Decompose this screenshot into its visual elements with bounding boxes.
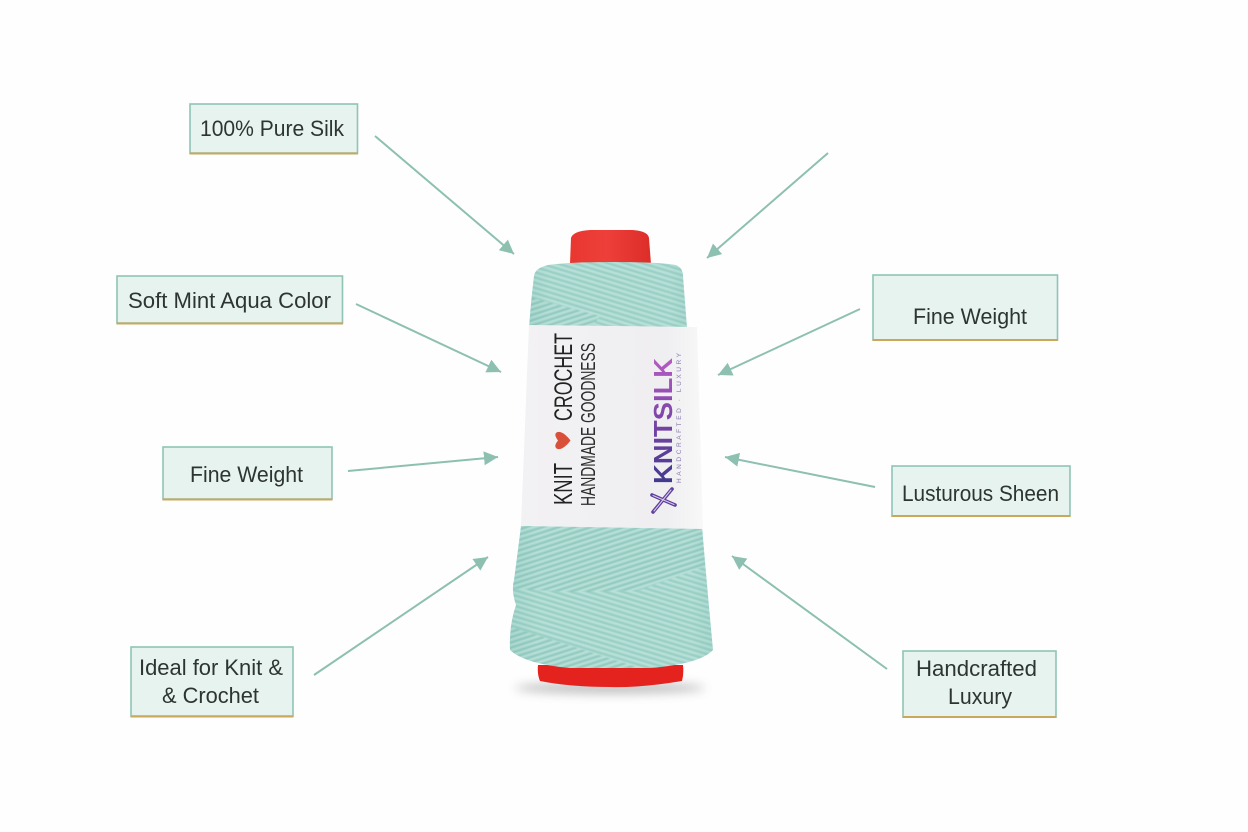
cone shadow xyxy=(515,682,705,694)
callout: 100% Pure Silk xyxy=(190,104,358,154)
callout: Lusturous Sheen xyxy=(892,466,1070,516)
callout: Fine Weight right: Fine Weight xyxy=(913,304,1027,329)
heart icon xyxy=(555,432,570,449)
callout: Fine Weight left xyxy=(162,447,332,500)
upper yarn winding xyxy=(529,262,687,327)
callout: Soft Mint Aqua Color: Soft Mint Aqua Color xyxy=(128,288,331,313)
yarn cone product xyxy=(505,230,717,694)
arrow: lower right to cone xyxy=(732,556,887,669)
arrow: middle right to cone xyxy=(725,457,875,487)
arrow: top left to cone xyxy=(375,136,514,254)
knit text: KNIT xyxy=(548,463,578,505)
callout: Fine Weight left: Fine Weight xyxy=(190,462,303,487)
arrow: upper left to cone xyxy=(356,304,501,372)
red top of cone xyxy=(570,230,651,264)
arrow: lower left to cone xyxy=(314,557,488,675)
knitsilk logo xyxy=(648,352,683,512)
arrow: upper right to cone xyxy=(718,309,860,375)
logo tagline: HANDCRAFTED · LUXURY xyxy=(676,352,683,483)
crochet text: CROCHET xyxy=(550,333,578,421)
callout: Handcrafted Luxury: Luxury xyxy=(948,684,1012,709)
callout: Soft Mint Aqua Color xyxy=(116,276,343,324)
red base of cone xyxy=(538,665,683,687)
callout: Handcrafted Luxury xyxy=(902,651,1056,717)
knitsilk wordmark: KNITSILK xyxy=(648,358,678,484)
callout: 100% Pure Silk: 100% Pure Silk xyxy=(200,116,345,141)
crossed needles icon xyxy=(652,489,675,512)
handmade goodness text: HANDMADE GOODNESS xyxy=(578,343,600,506)
callout: Fine Weight right xyxy=(872,275,1058,340)
arrow: middle left to cone xyxy=(348,457,498,471)
callout: Handcrafted Luxury: Handcrafted xyxy=(916,656,1037,681)
callout: Ideal for Knit & Crochet xyxy=(130,647,294,716)
callout: Ideal for Knit & Crochet: & Crochet xyxy=(162,683,259,708)
callout: Lusturous Sheen: Lusturous Sheen xyxy=(902,481,1059,506)
callout: Ideal for Knit & Crochet: Ideal for Knit & xyxy=(139,655,283,680)
paper label band xyxy=(521,325,703,529)
lower yarn winding xyxy=(505,524,717,672)
arrow: top right to cone xyxy=(707,153,828,258)
